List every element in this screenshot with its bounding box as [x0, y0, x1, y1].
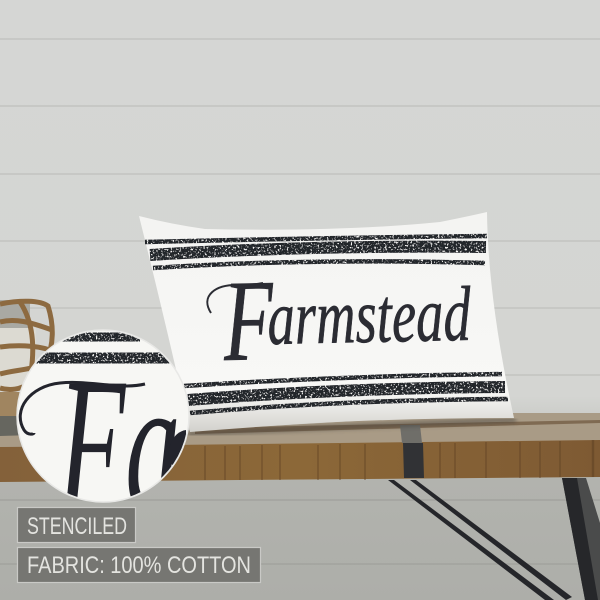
magnified detail circle	[16, 329, 190, 503]
magnified detail circle: Fa	[57, 339, 180, 550]
bench	[0, 392, 600, 482]
script word: Farmstead: armstead	[267, 270, 472, 361]
bench legs	[388, 478, 600, 600]
lantern	[0, 300, 52, 390]
script word: Farmstead	[207, 252, 472, 385]
label: stenciled: STENCILED	[27, 513, 127, 540]
label: fabric	[18, 548, 260, 582]
label: stenciled	[18, 508, 136, 542]
bottom stripes	[184, 374, 508, 413]
top stripes	[145, 236, 487, 268]
script word: Farmstead: F	[221, 256, 275, 385]
label: fabric: FABRIC: 100% COTTON	[27, 552, 251, 579]
pillow	[139, 212, 516, 434]
